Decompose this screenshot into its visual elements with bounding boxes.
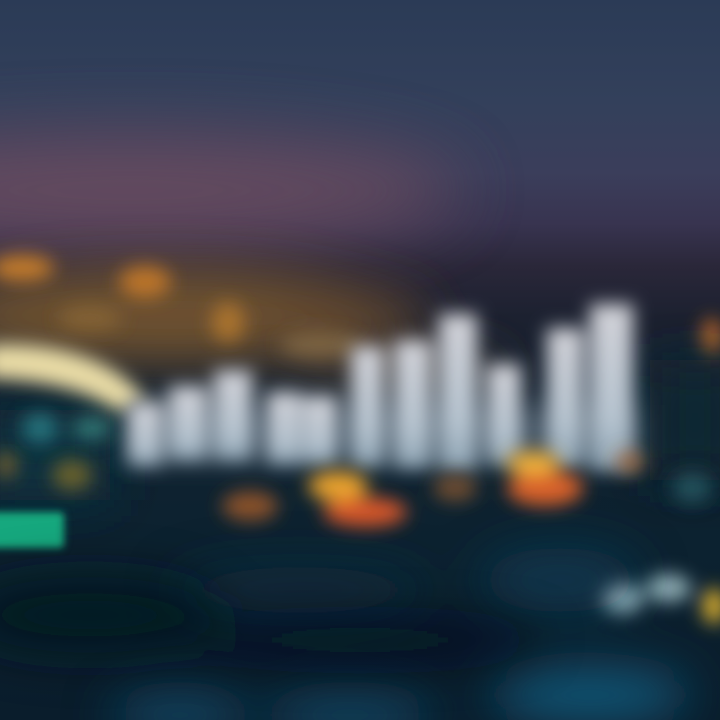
haze between towers <box>130 405 640 460</box>
blue foreground glows <box>110 548 690 720</box>
distant orange lights <box>0 255 720 358</box>
dark foreground shadow <box>0 577 540 658</box>
white tower blocks <box>128 304 633 470</box>
teal lights <box>22 413 712 503</box>
white and yellow lights lower right <box>601 574 720 624</box>
cream curved arc structure <box>0 344 145 412</box>
orange street lights <box>0 451 645 527</box>
distant warm city glow <box>0 267 510 392</box>
dark building masses <box>0 360 720 500</box>
green neon block <box>0 512 64 548</box>
